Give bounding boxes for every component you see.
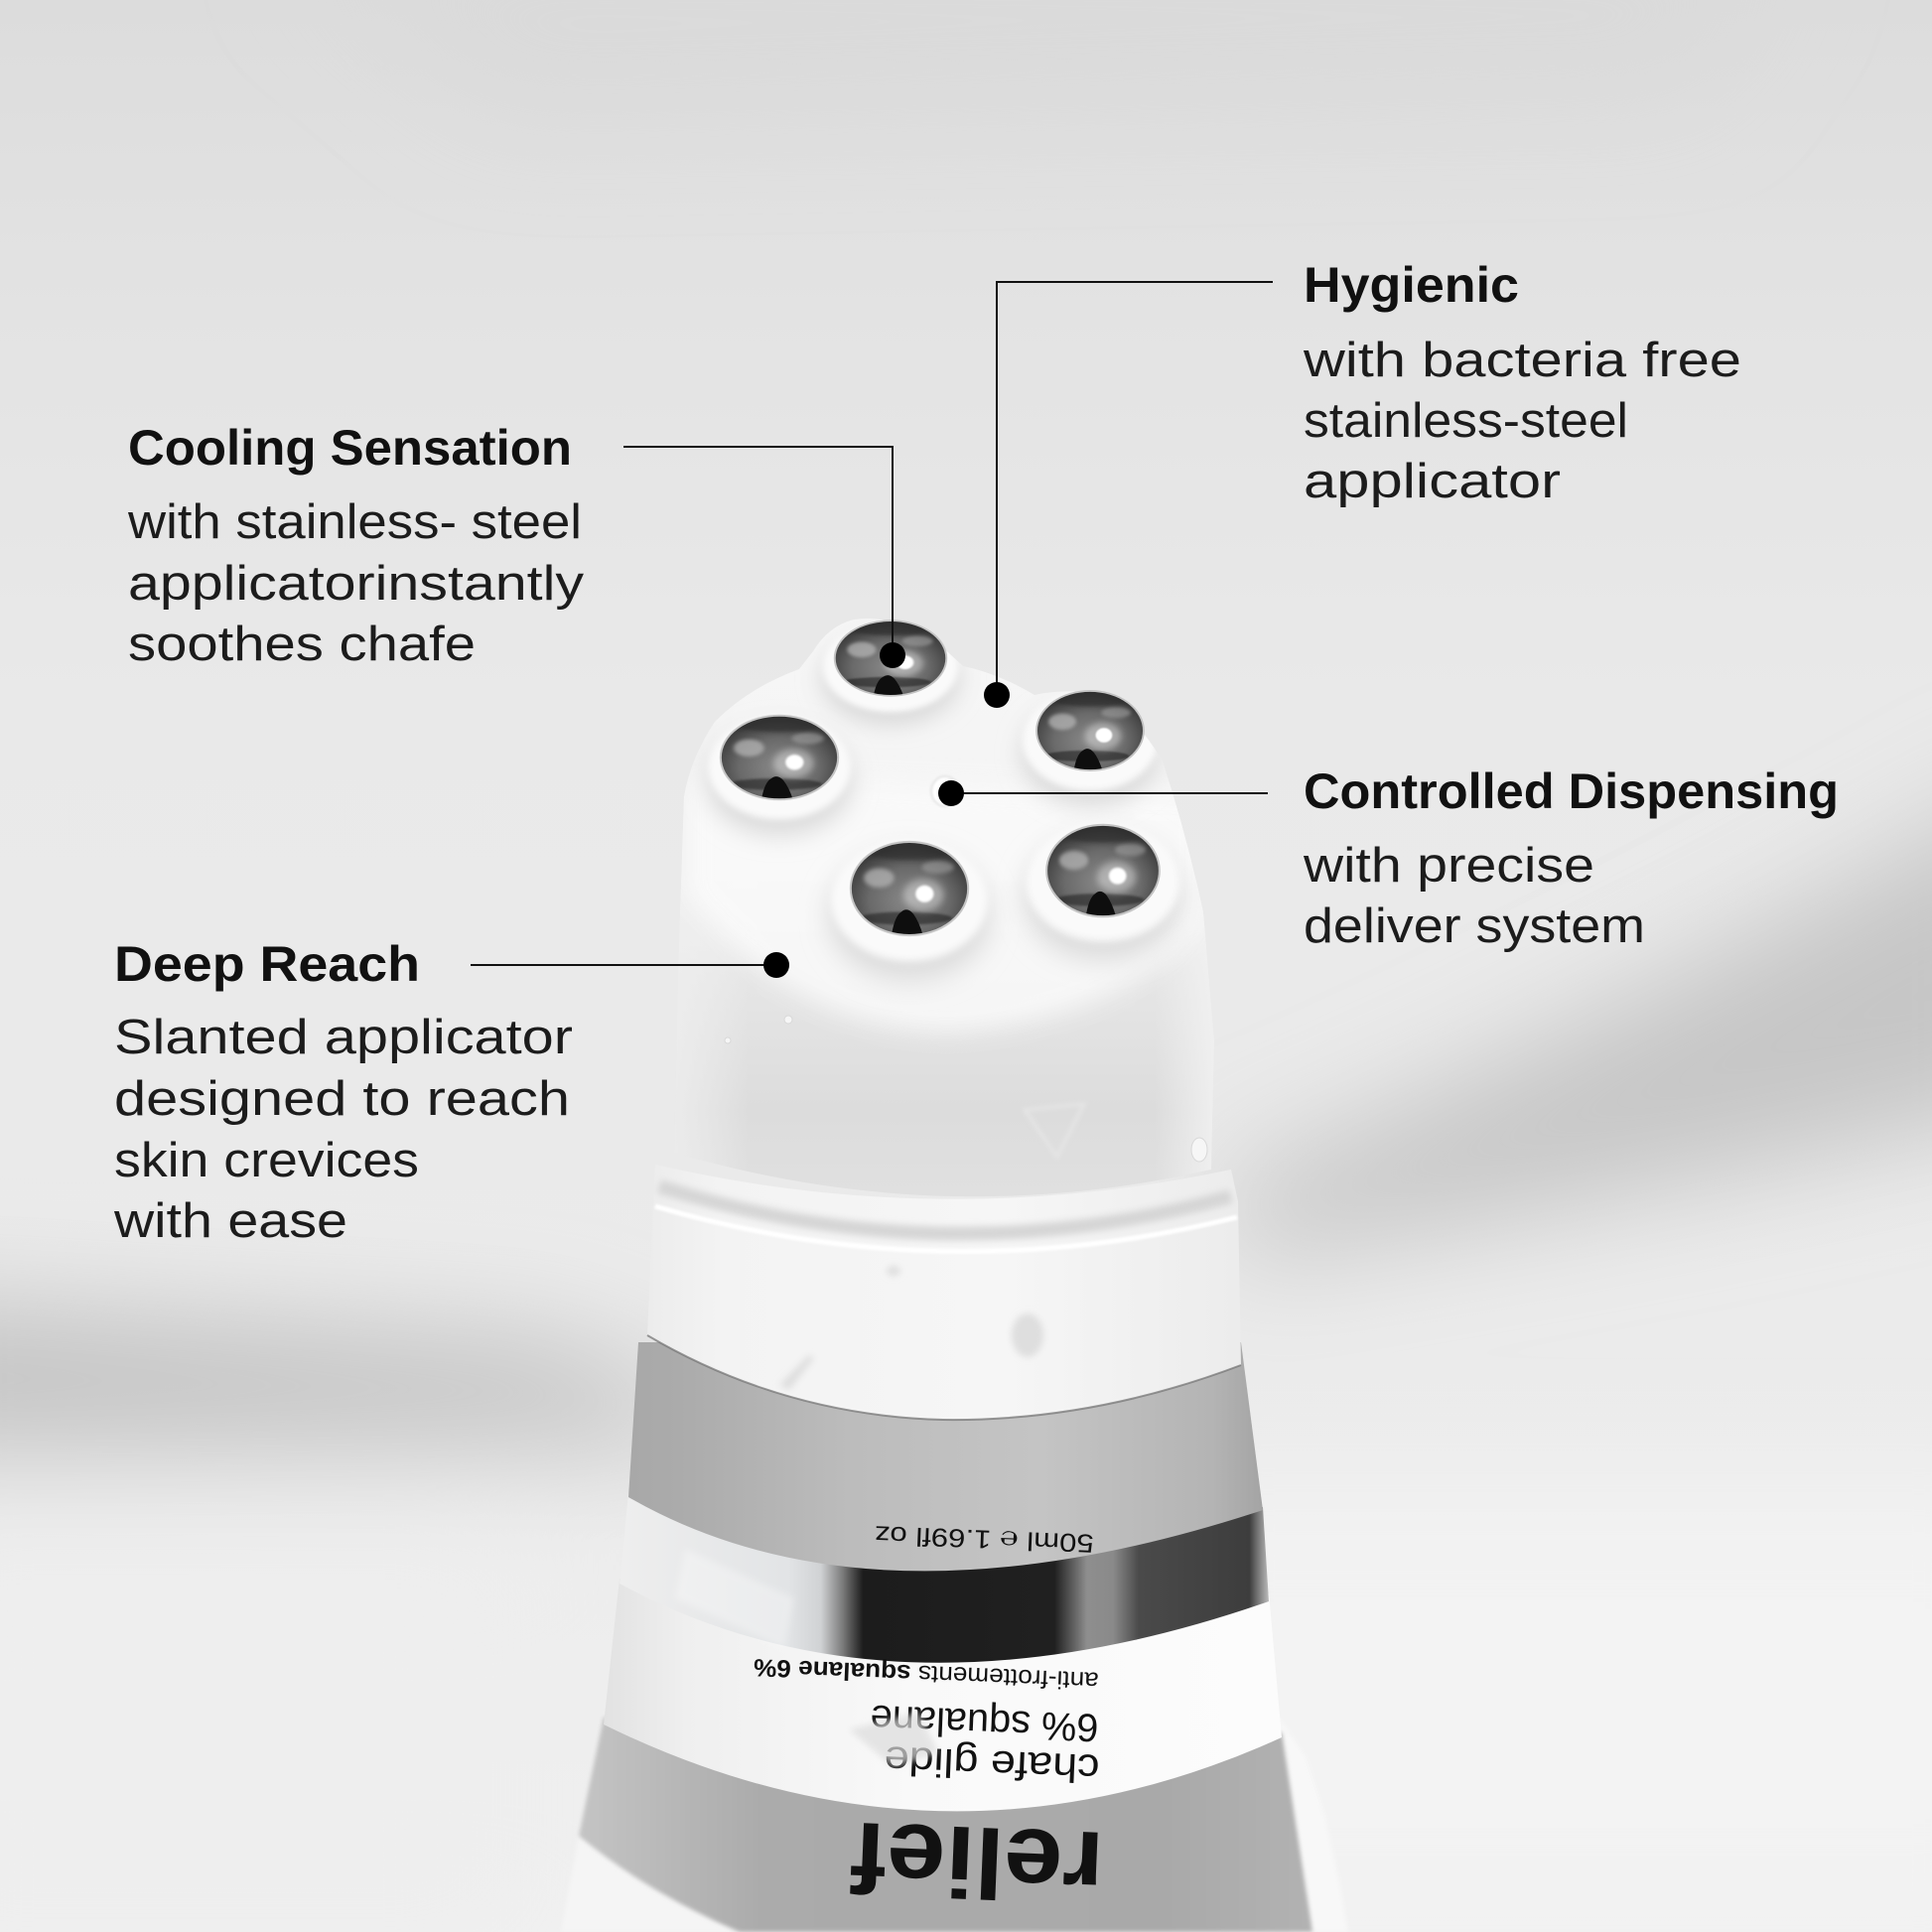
volume text: 50ml ℮ 1.69fl oz	[874, 1520, 1094, 1559]
description: soothes chafe	[128, 618, 476, 671]
product: tube with roller applicator	[561, 606, 1348, 1932]
description: designed to reach	[114, 1072, 570, 1126]
description	[1303, 839, 1645, 953]
description	[1303, 334, 1741, 508]
description: stainless-steel	[1304, 394, 1628, 448]
product name text: chafe glide	[884, 1737, 1100, 1790]
socket rims	[706, 621, 1182, 980]
torn white edge on right	[1279, 1718, 1348, 1932]
descriptor text: anti-frottements squalane 6%	[753, 1653, 1099, 1695]
silver band reflection	[675, 1549, 794, 1648]
tube lower gray band	[579, 1718, 1312, 1932]
heading: Deep Reach	[114, 936, 420, 992]
description	[113, 1011, 573, 1248]
heading: Controlled Dispensing	[1304, 763, 1839, 819]
callout: Hygienic	[984, 257, 1741, 708]
collar lower edge	[647, 1335, 1241, 1420]
bottom white tube section	[561, 1836, 740, 1932]
description: with precise	[1303, 839, 1594, 893]
description: with ease	[113, 1194, 347, 1248]
description: applicatorinstantly	[128, 557, 585, 611]
leader line and dot	[938, 780, 1268, 806]
dispensing hole	[931, 776, 959, 806]
water residue on label	[849, 1713, 938, 1767]
callout: Cooling Sensation	[127, 420, 905, 671]
steel ball 5	[1046, 824, 1160, 918]
steel ball 3	[721, 715, 838, 801]
description: with bacteria free	[1303, 334, 1741, 387]
callout: Controlled Dispensing	[938, 763, 1839, 953]
description: with stainless- steel	[127, 495, 582, 549]
upper gray band	[628, 1342, 1263, 1571]
leader line and dot	[623, 447, 905, 668]
steel ball 2	[1036, 690, 1144, 772]
printed label text	[753, 1520, 1106, 1922]
collar	[647, 1165, 1241, 1420]
roller cap	[681, 619, 1211, 1196]
brand name: relief	[849, 1801, 1106, 1922]
description: deliver system	[1304, 899, 1645, 953]
leader line and dot	[984, 282, 1273, 708]
description: Slanted applicator	[114, 1011, 573, 1064]
description: applicator	[1304, 455, 1561, 508]
steel ball 4	[851, 841, 968, 937]
cap shoulder highlight	[702, 881, 1170, 1035]
tube body	[561, 1342, 1348, 1932]
embossed triangle mark	[1025, 1104, 1084, 1157]
description	[127, 495, 585, 671]
callout: Deep Reach	[113, 936, 789, 1248]
heading: Hygienic	[1304, 257, 1519, 313]
collar shadow groove	[659, 1186, 1231, 1234]
tube white label band	[604, 1579, 1282, 1811]
concentration text: 6% squalane	[870, 1697, 1099, 1749]
leader line and dot	[471, 952, 789, 978]
metallic silver band	[620, 1493, 1269, 1663]
steel ball 1	[835, 620, 946, 698]
description: skin crevices	[114, 1134, 419, 1187]
water droplets	[725, 1016, 1207, 1162]
heading: Cooling Sensation	[128, 420, 572, 476]
collar scuff marks	[779, 1266, 1043, 1390]
